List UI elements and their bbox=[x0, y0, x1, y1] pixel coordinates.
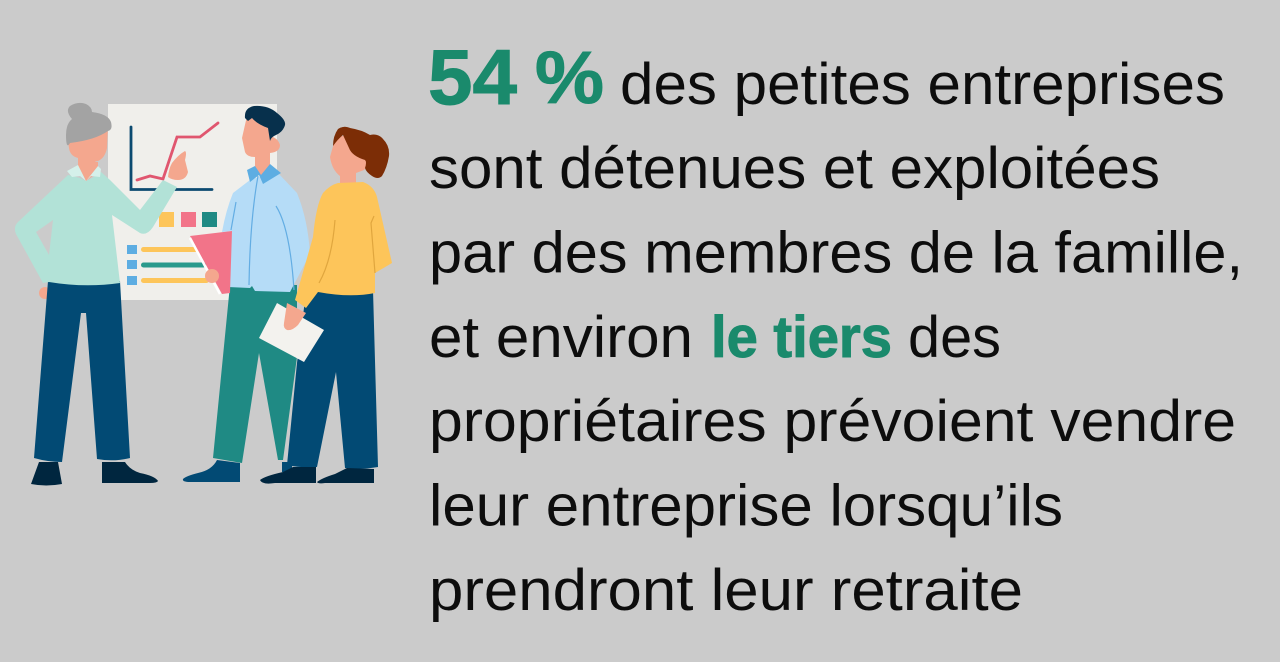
person: woman in yellow sweater bbox=[259, 127, 392, 484]
shoes bbox=[31, 462, 158, 486]
person: woman with grey hair pointing bbox=[15, 103, 188, 486]
colour squares bbox=[159, 212, 217, 227]
line 7: prendront leur retraite bbox=[429, 558, 1023, 623]
line 4: des bbox=[908, 305, 1001, 370]
shoes bbox=[260, 467, 374, 484]
person: man in blue shirt bbox=[183, 106, 310, 482]
collar bbox=[247, 164, 281, 184]
hair bbox=[245, 106, 285, 141]
line 5: propriétaires prévoient vendre bbox=[429, 389, 1236, 454]
line 2: sont détenues et exploitées bbox=[429, 136, 1160, 201]
statistic text block bbox=[428, 33, 1243, 623]
pink clipboard bbox=[190, 231, 232, 294]
hand bbox=[205, 269, 219, 283]
sweater bbox=[295, 182, 392, 308]
document bbox=[259, 303, 324, 362]
sweater bbox=[15, 172, 177, 285]
line 4: et environ bbox=[429, 305, 693, 370]
pointing hand bbox=[168, 151, 188, 180]
line 6: leur entreprise lorsqu’ils bbox=[429, 474, 1063, 538]
shoes bbox=[183, 460, 292, 482]
teal trousers bbox=[213, 285, 297, 463]
line 3: par des membres de la famille, bbox=[429, 220, 1243, 286]
shirt bbox=[222, 173, 310, 292]
line 1 bbox=[428, 33, 1225, 121]
hair bbox=[66, 103, 112, 145]
line 4 bbox=[429, 305, 1001, 370]
presentation board bbox=[108, 104, 277, 300]
hair bbox=[333, 127, 389, 178]
navy trousers bbox=[287, 290, 378, 469]
line 4: le tiers bbox=[711, 305, 892, 370]
trousers bbox=[34, 281, 130, 462]
line 1: % bbox=[535, 36, 604, 119]
line 1: 54 bbox=[428, 33, 517, 121]
illustration: team around a presentation board bbox=[15, 103, 392, 486]
hand bbox=[284, 303, 306, 330]
face and neck bbox=[330, 136, 367, 186]
line chart bbox=[131, 123, 218, 190]
shirt seams bbox=[231, 176, 294, 290]
bullet list bbox=[127, 245, 209, 285]
sweater seams bbox=[319, 216, 375, 283]
neck and face bbox=[68, 126, 108, 181]
face and neck bbox=[242, 116, 280, 177]
collar bbox=[67, 165, 101, 181]
line 1: des petites entreprises bbox=[620, 52, 1225, 117]
back hand bbox=[39, 287, 51, 299]
